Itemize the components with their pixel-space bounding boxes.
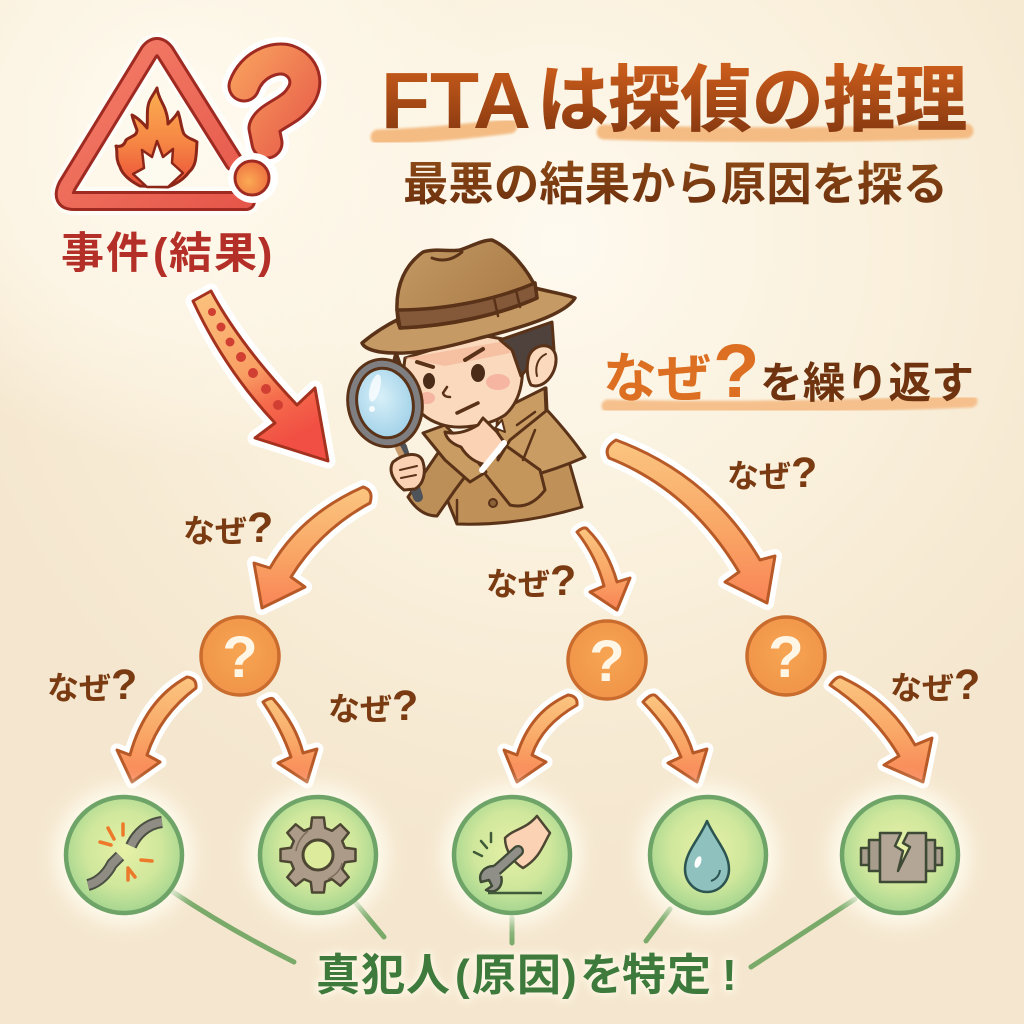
text halo: 真犯人(原因)を特定! (316, 951, 737, 1000)
icon: flame (116, 88, 197, 187)
orange why: なぜ? (603, 329, 759, 414)
heading: FTA: FTA (381, 56, 531, 145)
underline brush (608, 401, 971, 407)
heading: rest: は探偵の推理 (537, 61, 967, 141)
why label 1: なぜ? (183, 504, 273, 552)
title (378, 56, 967, 210)
text: repeat why (603, 329, 974, 414)
arrow: middle question to wrench (504, 695, 577, 782)
arrow: detective to left question (254, 487, 371, 608)
brown repeat: を繰り返す (760, 360, 974, 408)
cause: broken wire (66, 797, 182, 913)
why label 5: なぜ? (328, 682, 418, 730)
cause: worn gear (260, 797, 376, 913)
why label 3: なぜ? (727, 449, 817, 497)
icon: question mark (228, 59, 305, 203)
node: left question: ? (222, 625, 258, 690)
cause: water drop (650, 797, 766, 913)
arrow: left question to gear (263, 698, 317, 782)
arrow: left question to wire (117, 677, 196, 782)
node: middle question: ? (589, 629, 625, 694)
why label 4: なぜ? (47, 661, 137, 709)
node: right question: ? (768, 625, 804, 690)
cause: human error with wrench (454, 797, 570, 913)
panel: detective illustration (340, 240, 585, 524)
node: right question (747, 617, 825, 695)
node: middle question (568, 621, 646, 699)
glow (56, 787, 968, 923)
node: left question (201, 617, 279, 695)
underline brush (378, 126, 966, 137)
hat (362, 240, 575, 353)
connector lines to root causes (173, 892, 855, 967)
hand on chin (445, 418, 505, 470)
head (392, 322, 556, 427)
panel: incident (result) (61, 47, 305, 278)
identify the real culprit: 真犯人(原因)を特定! (316, 951, 737, 1000)
arrow: middle question to drop (643, 695, 707, 782)
arrow: big dotted arrow from incident to detective (193, 291, 328, 461)
why label 6: なぜ? (890, 661, 980, 709)
icon: warning triangle with flame (65, 47, 246, 201)
cause: broken motor (842, 797, 958, 913)
conclusion text (316, 951, 737, 1000)
arrow: detective to middle question (577, 528, 630, 610)
arrow: right question to motor (830, 677, 932, 782)
root cause circles (56, 787, 968, 923)
coat (408, 388, 585, 524)
icon: magnifying glass (340, 352, 430, 497)
why label 2: なぜ? (486, 557, 576, 605)
why labels (47, 449, 980, 730)
label: incident: 事件(結果) (61, 230, 272, 278)
arrow: detective to right question (607, 440, 775, 603)
branch arrows (117, 440, 932, 782)
intermediate question nodes (201, 617, 825, 699)
subheading: 最悪の結果から原因を探る (403, 158, 948, 210)
